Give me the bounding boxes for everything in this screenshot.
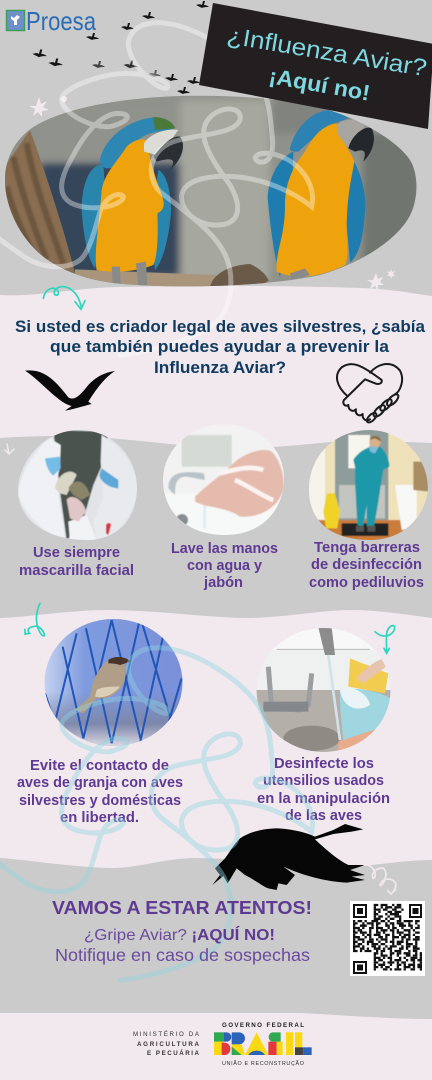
arrow: white small left	[5, 444, 14, 454]
silhouette: flying goose	[212, 824, 365, 890]
photo circle: footbath disinfection	[309, 430, 428, 540]
intro question: que también puedes ayudar a prevenir la	[50, 337, 390, 356]
blue swirl ribbon	[0, 648, 313, 980]
title banner: ¡Aquí no!	[267, 63, 372, 106]
tip: disinfect: de las aves	[285, 808, 362, 824]
tip: disinfect: en la manipulación	[257, 791, 390, 807]
white squiggle arrow	[364, 865, 396, 894]
government logo	[214, 1022, 312, 1067]
tip: avoid contact: en libertad.	[60, 810, 139, 826]
tip: wash hands	[171, 541, 278, 591]
tip: mask	[19, 545, 134, 579]
call to action	[52, 897, 312, 965]
macaw right	[268, 110, 374, 280]
tip: footbath: de desinfección	[311, 557, 422, 573]
decorative stars top	[29, 96, 395, 291]
title banner: ¿Influenza Aviar?	[225, 22, 429, 82]
ministry label	[133, 1031, 200, 1057]
tip: footbath: Tenga barreras	[314, 540, 420, 556]
flock of small birds	[32, 1, 209, 94]
ministry label: MINISTÉRIO DA	[133, 1031, 200, 1038]
tip: wash hands: con agua y	[187, 558, 262, 574]
tip: mask: Use siempre	[33, 545, 120, 561]
arrow: teal curl left	[25, 603, 44, 636]
tip: wash hands: jabón	[203, 575, 243, 591]
ministry label: E PECUÁRIA	[147, 1050, 200, 1057]
government logo: GOVERNO FEDERAL	[222, 1022, 304, 1029]
pink band: second tips	[0, 610, 432, 868]
tip: wash hands: Lave las manos	[171, 541, 278, 557]
logo: Proesa: Proesa	[26, 6, 96, 36]
title banner	[199, 3, 432, 129]
tip: disinfect	[257, 756, 390, 824]
ministry label: AGRICULTURA	[137, 1041, 200, 1048]
arrow: teal curl right	[375, 626, 395, 653]
intro question: Si usted es criador legal de aves silvestres, ¿sabía	[15, 317, 426, 336]
tip labels row one	[19, 540, 424, 591]
pink band: footer	[0, 1013, 432, 1080]
tip: avoid contact	[17, 758, 183, 826]
QR code	[350, 901, 425, 976]
logo: Proesa	[6, 6, 96, 36]
intro question: Influenza Aviar?	[154, 358, 286, 377]
icon: handshake heart	[337, 364, 402, 424]
arrow: teal curl top	[43, 287, 85, 309]
tip: mask: mascarilla facial	[19, 563, 134, 579]
tip: footbath	[309, 540, 424, 591]
tip: avoid contact: silvestres y domésticas	[19, 793, 181, 809]
macaw left	[82, 117, 183, 287]
icon: black bird	[25, 370, 115, 411]
tip labels row two	[17, 756, 390, 826]
photo circle: washing hands	[160, 420, 287, 537]
government logo: UNIÃO E RECONSTRUÇÃO	[222, 1060, 304, 1067]
tip: avoid contact: Evite el contacto de	[30, 758, 169, 774]
pink band: intro	[0, 286, 432, 448]
call to action: Notifique en caso de sospechas	[55, 945, 310, 965]
call to action: VAMOS A ESTAR ATENTOS!	[52, 897, 312, 918]
tip: disinfect: Desinfecte los	[274, 756, 374, 772]
intro question	[15, 317, 426, 377]
white swirl ribbon	[0, 23, 313, 355]
photo circle: sparrow behind net	[44, 619, 182, 746]
photo circle: washing utensils	[253, 625, 393, 753]
tip: footbath: como pediluvios	[309, 575, 424, 591]
photo circle: protective suits and mask	[18, 430, 137, 540]
photo: two macaws	[5, 96, 416, 286]
brasil colour blocks	[214, 1032, 312, 1055]
call to action: ¿Gripe Aviar? ¡AQUÍ NO!	[84, 925, 275, 944]
tip: disinfect: utensilios usados	[263, 773, 384, 789]
tip: avoid contact: aves de granja con aves	[17, 775, 183, 791]
